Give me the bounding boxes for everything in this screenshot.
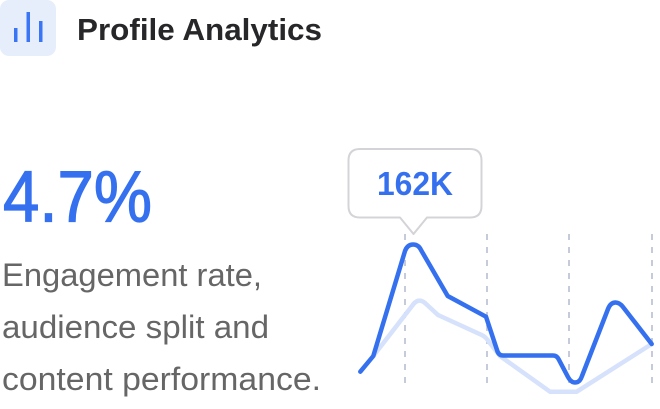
primary series line <box>360 244 652 382</box>
comparison series line <box>373 301 652 392</box>
title: Profile Analytics <box>77 12 322 47</box>
line chart <box>360 234 652 392</box>
description text <box>2 257 321 397</box>
description text: content performance. <box>2 361 321 397</box>
headline metric: 4.7% <box>3 158 152 238</box>
description text: Engagement rate, <box>2 257 262 293</box>
description text: audience split and <box>2 309 269 345</box>
tooltip callout: 162K <box>377 165 453 202</box>
tooltip callout <box>348 149 482 234</box>
icon: bar chart badge <box>0 0 56 56</box>
